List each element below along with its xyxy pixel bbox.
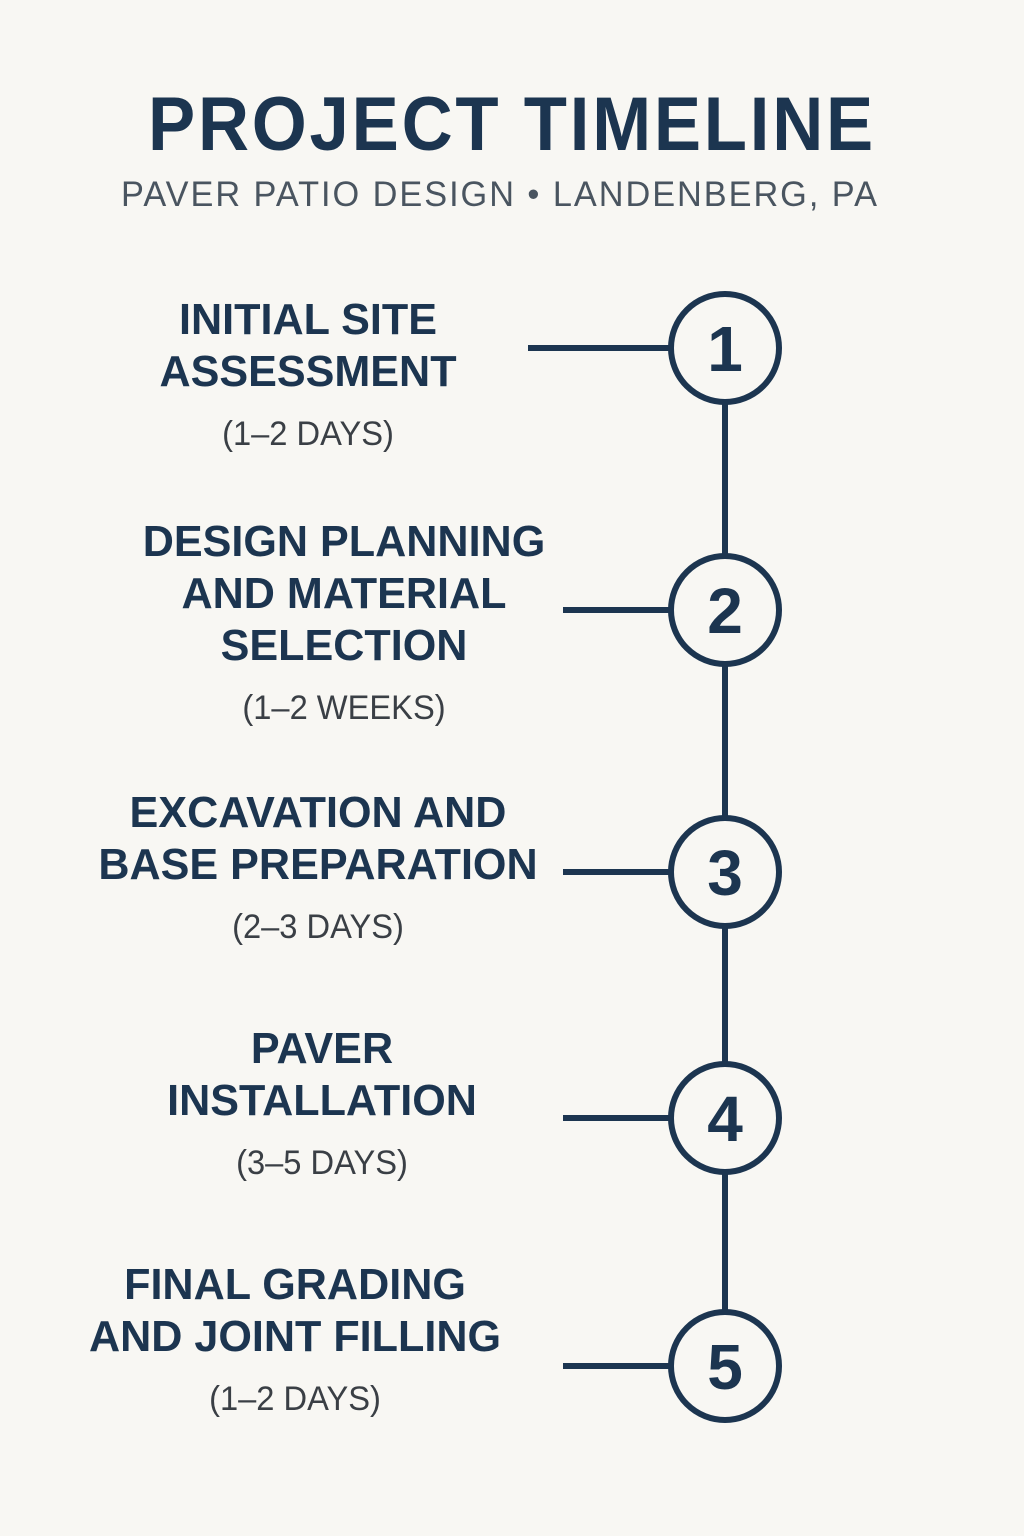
step 2 text: (1–2 WEEKS) (242, 689, 446, 727)
subtitle: PAVER PATIO DESIGN • LANDENBERG, PA (121, 175, 879, 214)
step 1 text: INITIAL SITE (179, 295, 437, 344)
timeline graphic: 3 (707, 837, 743, 909)
step 2 text (143, 517, 545, 727)
step 1 text: (1–2 DAYS) (222, 415, 394, 453)
step 1 text (159, 295, 457, 453)
step 2 text: DESIGN PLANNING (143, 517, 545, 566)
timeline graphic: 5 (707, 1331, 743, 1403)
step 3 text (98, 788, 538, 946)
step 4 text: (3–5 DAYS) (236, 1144, 408, 1182)
step 5 text: (1–2 DAYS) (209, 1380, 381, 1418)
step 3 text: BASE PREPARATION (98, 840, 538, 889)
step 1 text: ASSESSMENT (159, 347, 457, 396)
step 4 text: PAVER (251, 1024, 393, 1073)
step 2 text: SELECTION (221, 621, 467, 670)
step 4 text: INSTALLATION (167, 1076, 477, 1125)
title: PROJECT TIMELINE (148, 82, 876, 167)
timeline graphic: 1 (707, 313, 743, 385)
step 4 text (167, 1024, 477, 1182)
timeline graphic: 2 (707, 575, 743, 647)
step 3 text: (2–3 DAYS) (232, 908, 404, 946)
step 5 text (89, 1260, 501, 1418)
step 5 text: FINAL GRADING (124, 1260, 466, 1309)
step 2 text: AND MATERIAL (182, 569, 506, 618)
step 3 text: EXCAVATION AND (130, 788, 506, 837)
timeline graphic: 4 (707, 1083, 743, 1155)
step 5 text: AND JOINT FILLING (89, 1312, 501, 1361)
